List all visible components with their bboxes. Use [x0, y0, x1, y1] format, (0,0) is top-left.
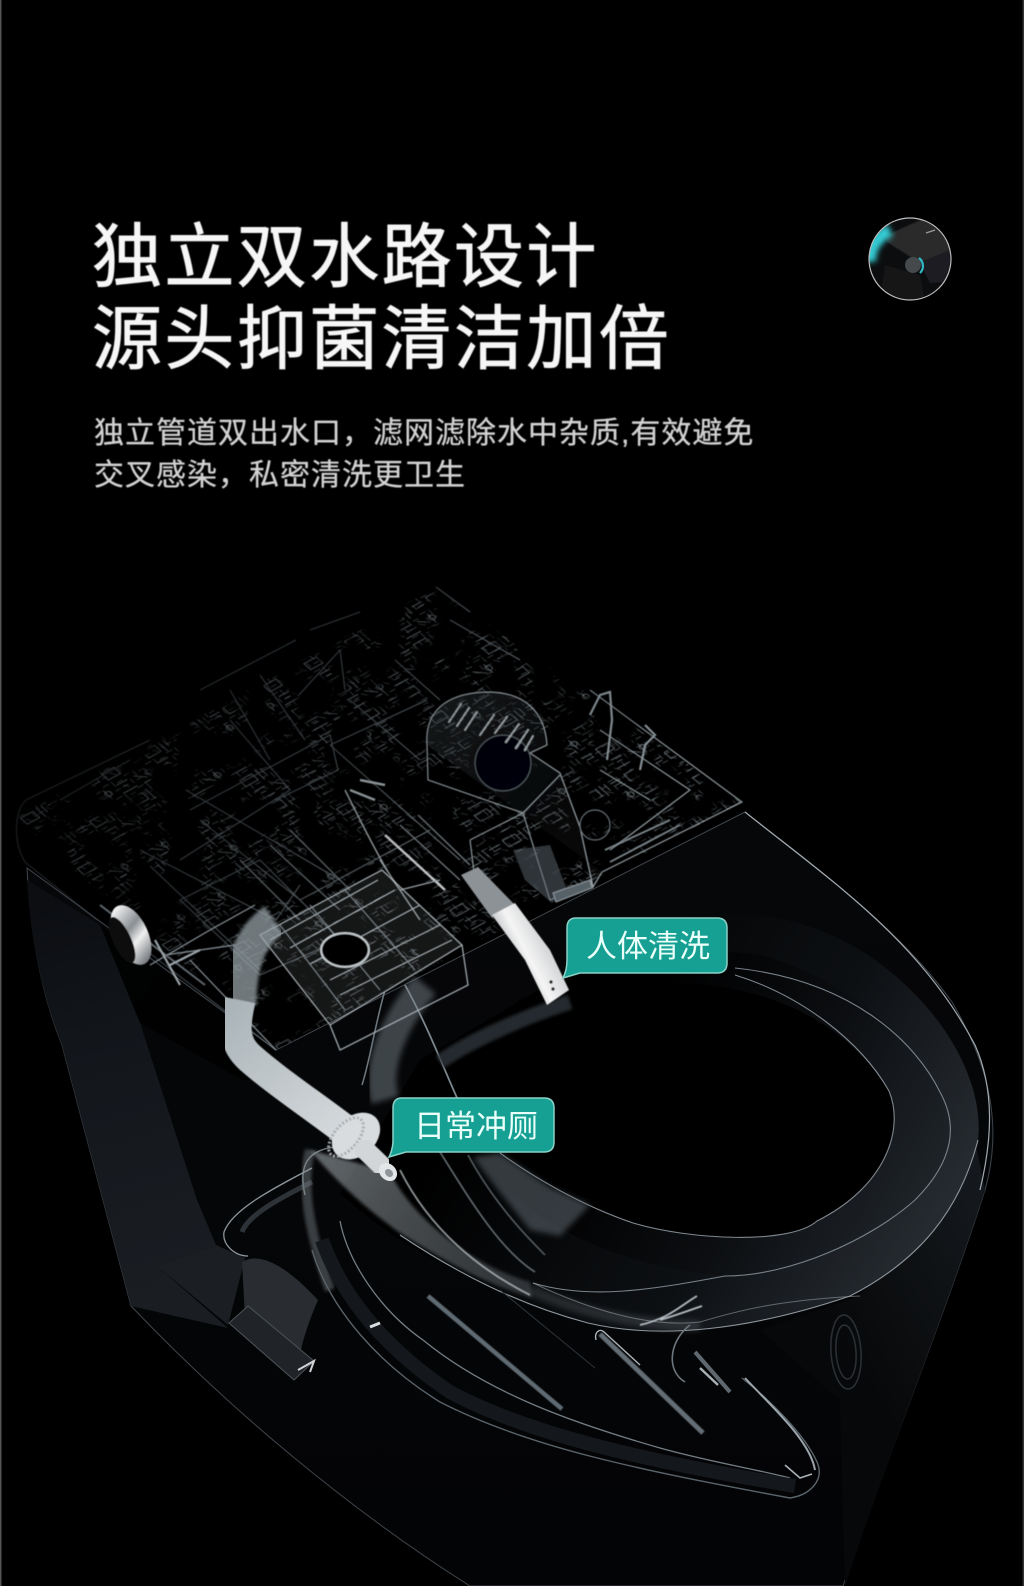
white drain pipe — [236, 920, 401, 1185]
toilet body silhouette — [27, 812, 993, 1586]
clear valve box — [100, 870, 468, 1050]
grey translucent pane — [473, 1153, 590, 1236]
callout: body wash: 人体清洗 — [586, 929, 710, 964]
pipe collar — [322, 1103, 389, 1169]
hinge block — [157, 1245, 318, 1380]
spray wand — [461, 867, 569, 1005]
icon: product thumbnail circle — [869, 218, 955, 300]
bowl rim rings — [340, 812, 990, 1331]
title: 源头抑菌清洁加倍 — [92, 300, 671, 378]
water tank wireframe — [16, 586, 744, 1050]
subtitle text: 交叉感染，私密清洗更卫生 — [94, 459, 466, 492]
inner stepped frames — [140, 735, 340, 920]
spray channel detail — [240, 780, 470, 920]
bowl opening — [440, 983, 894, 1237]
subtitle text — [94, 416, 754, 492]
callout: daily flush: 日常冲厕 — [414, 1109, 538, 1144]
chrome knob — [102, 899, 160, 971]
oval button — [828, 1314, 864, 1390]
title — [92, 218, 671, 378]
clear column — [306, 1150, 330, 1290]
upper translucent tube — [382, 985, 425, 1100]
bright fan — [310, 1150, 532, 1298]
subtitle text: 独立管道双出水口，滤网滤除水中杂质,有效避免 — [94, 417, 754, 450]
inner rim band — [420, 952, 950, 1276]
translucent water channels — [224, 985, 860, 1498]
callout: body wash — [563, 918, 727, 978]
lower water channel — [340, 1221, 790, 1478]
streak strips — [428, 1296, 562, 1409]
outer tank edges — [122, 587, 742, 1050]
motor housing and arm — [427, 692, 680, 903]
rear bracket — [672, 1325, 730, 1392]
pipe nozzle — [358, 1143, 386, 1170]
callout: daily flush — [389, 1098, 554, 1157]
outer rim — [340, 914, 979, 1331]
left curved channel — [224, 1168, 312, 1256]
title: 独立双水路设计 — [92, 218, 599, 296]
